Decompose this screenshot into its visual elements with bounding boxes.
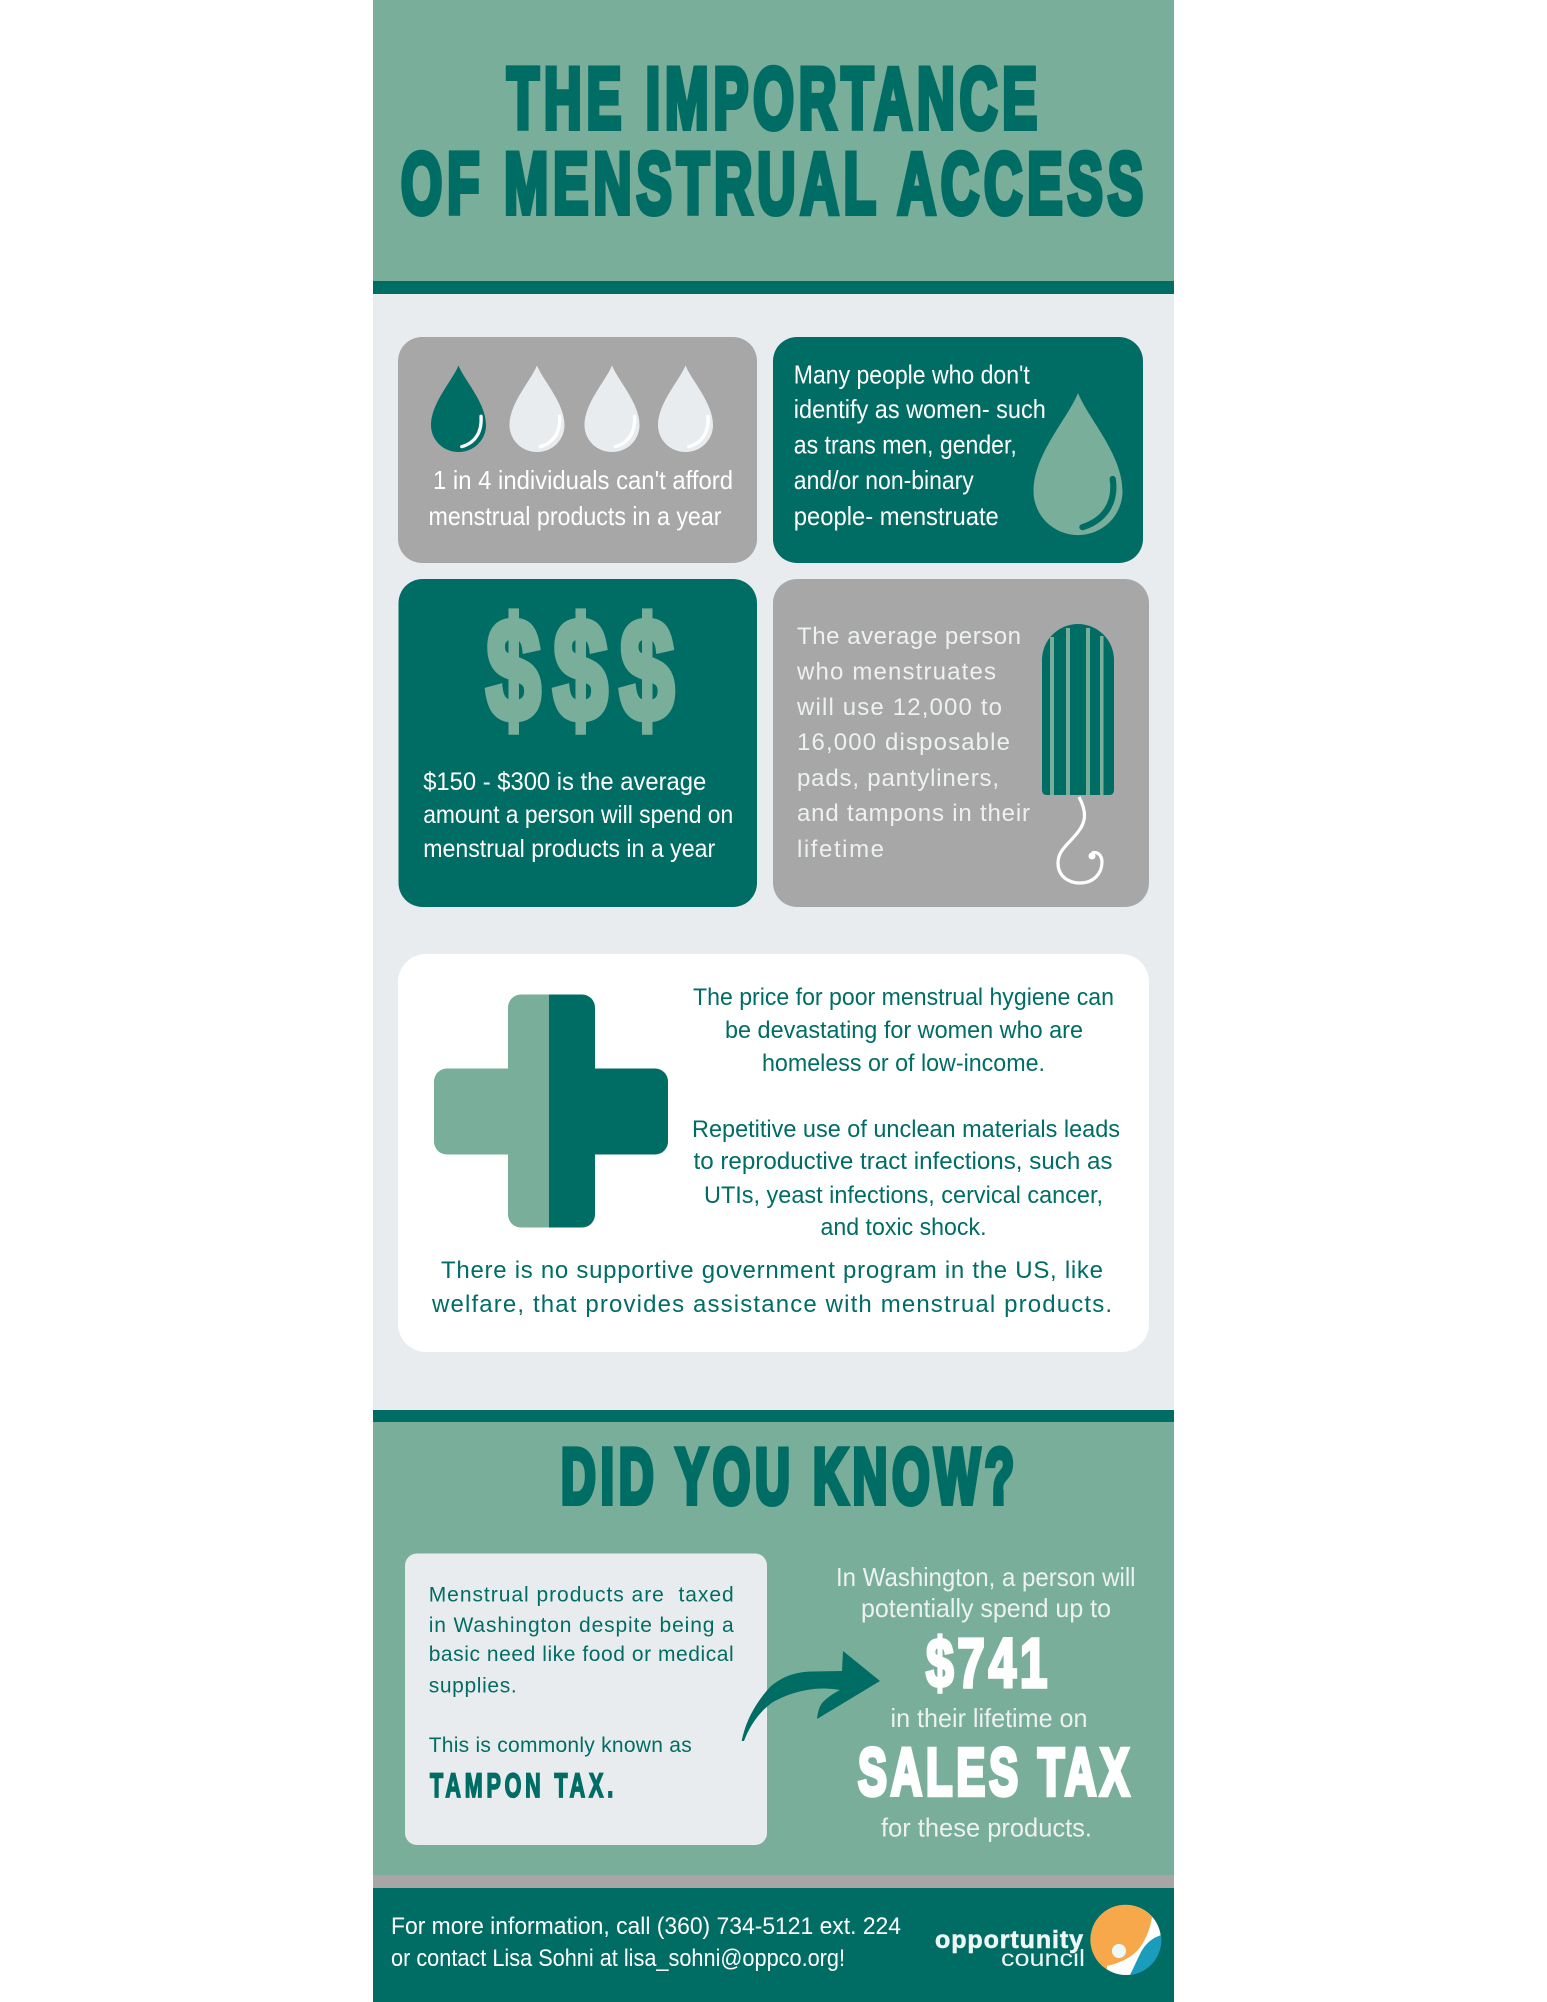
callout: tampon tax: basic need like food or medical xyxy=(429,1643,734,1666)
text: repetitive use: UTIs, yeast infections, cervical cancer, xyxy=(704,1182,1103,1209)
text: sales tax callout: in their lifetime on xyxy=(890,1703,1088,1733)
text: average person: will use 12,000 to xyxy=(796,694,1002,721)
text: 1 in 4: 1 in 4 individuals can't afford xyxy=(433,465,733,495)
text: sales tax callout: for these products. xyxy=(881,1812,1092,1842)
text: average person: The average person xyxy=(797,623,1021,650)
panel: yearly cost xyxy=(398,579,757,907)
text: sales tax callout xyxy=(836,1562,1136,1842)
text: average person: pads, pantyliners, xyxy=(797,765,999,792)
text: repetitive use: and toxic shock. xyxy=(820,1214,986,1241)
icon: dollar signs: $ xyxy=(620,589,674,751)
callout: tampon tax: Menstrual products are taxed xyxy=(429,1584,734,1606)
text: many people: people- menstruate xyxy=(794,501,999,531)
text: contact: For more information, call (360) 734-5121 ext. 224 xyxy=(391,1913,901,1940)
icon: large drop xyxy=(1034,393,1122,535)
panel: did you know xyxy=(373,1410,1174,1875)
logo: opportunity council: council xyxy=(1001,1945,1085,1971)
figure: $741: $741 xyxy=(926,1624,1051,1702)
callout: tampon tax: This is commonly known as xyxy=(429,1734,692,1757)
logo: opportunity council: opportunity xyxy=(935,1926,1083,1954)
title: THE IMPORTANCE xyxy=(507,51,1042,147)
text: price of poor hygiene: be devastating for women who are xyxy=(725,1017,1083,1044)
icon: dollar signs xyxy=(486,589,674,751)
text: no government program: There is no supportive government program in the US, like xyxy=(441,1257,1103,1284)
text: many people: as trans men, gender, xyxy=(794,430,1017,460)
panel: footer xyxy=(373,1875,1174,2002)
panel: header xyxy=(373,0,1174,294)
text: sales tax callout: potentially spend up to xyxy=(861,1593,1111,1623)
text: repetitive use: Repetitive use of unclean materials leads xyxy=(692,1116,1120,1143)
text: many people xyxy=(794,360,1046,531)
text: cost: amount a person will spend on xyxy=(423,801,733,829)
panel: 1 in 4 individuals xyxy=(398,337,757,563)
text: sales tax callout: In Washington, a person will xyxy=(836,1562,1136,1592)
callout: tampon tax: supplies. xyxy=(429,1674,517,1698)
text: average person: lifetime xyxy=(797,836,884,863)
icon: medical cross xyxy=(434,994,668,1228)
text: many people: identify as women- such xyxy=(794,394,1046,424)
heading: did you know: DID YOU KNOW? xyxy=(561,1432,1019,1520)
text: many people: Many people who don't xyxy=(794,360,1030,390)
callout: tampon tax: in Washington despite being a xyxy=(429,1614,734,1637)
arrow xyxy=(742,1651,880,1741)
panel: non-women who menstruate xyxy=(773,337,1143,563)
logo: opportunity council xyxy=(935,1905,1161,1975)
text: repetitive use: to reproductive tract infections, such as xyxy=(694,1148,1112,1175)
title xyxy=(401,51,1148,232)
text: contact xyxy=(391,1913,901,1972)
icon: tampon xyxy=(1042,624,1114,883)
text: average person: who menstruates xyxy=(796,658,996,686)
panel: lifetime products xyxy=(773,579,1149,907)
text: price of poor hygiene: homeless or of low-income. xyxy=(762,1050,1045,1077)
figure: sales tax: SALES TAX xyxy=(858,1735,1133,1810)
panel: health and hygiene xyxy=(398,954,1149,1352)
icon: four drops xyxy=(431,366,713,452)
callout: tampon tax: TAMPON TAX. xyxy=(430,1767,617,1805)
text: 1 in 4: menstrual products in a year xyxy=(428,501,722,531)
text: average person: 16,000 disposable xyxy=(797,729,1010,756)
text: contact: or contact Lisa Sohni at lisa_sohni@oppco.org! xyxy=(391,1945,845,1972)
icon: dollar signs: $ xyxy=(554,589,608,751)
text: no government program xyxy=(431,1257,1112,1318)
icon: dollar signs: $ xyxy=(486,589,540,751)
callout: tampon tax xyxy=(405,1554,767,1845)
text: many people: and/or non-binary xyxy=(794,465,974,495)
text: price of poor hygiene: The price for poor menstrual hygiene can xyxy=(693,984,1114,1011)
text: cost: $150 - $300 is the average xyxy=(423,768,706,796)
text: no government program: welfare, that provides assistance with menstrual products. xyxy=(431,1291,1112,1318)
text: 1 in 4 xyxy=(428,465,733,531)
text: cost: menstrual products in a year xyxy=(423,835,715,863)
text: average person xyxy=(796,623,1030,863)
text: repetitive use xyxy=(692,1116,1120,1241)
text: price of poor hygiene xyxy=(693,984,1114,1077)
text: average person: and tampons in their xyxy=(797,800,1030,827)
text: cost xyxy=(423,768,733,863)
